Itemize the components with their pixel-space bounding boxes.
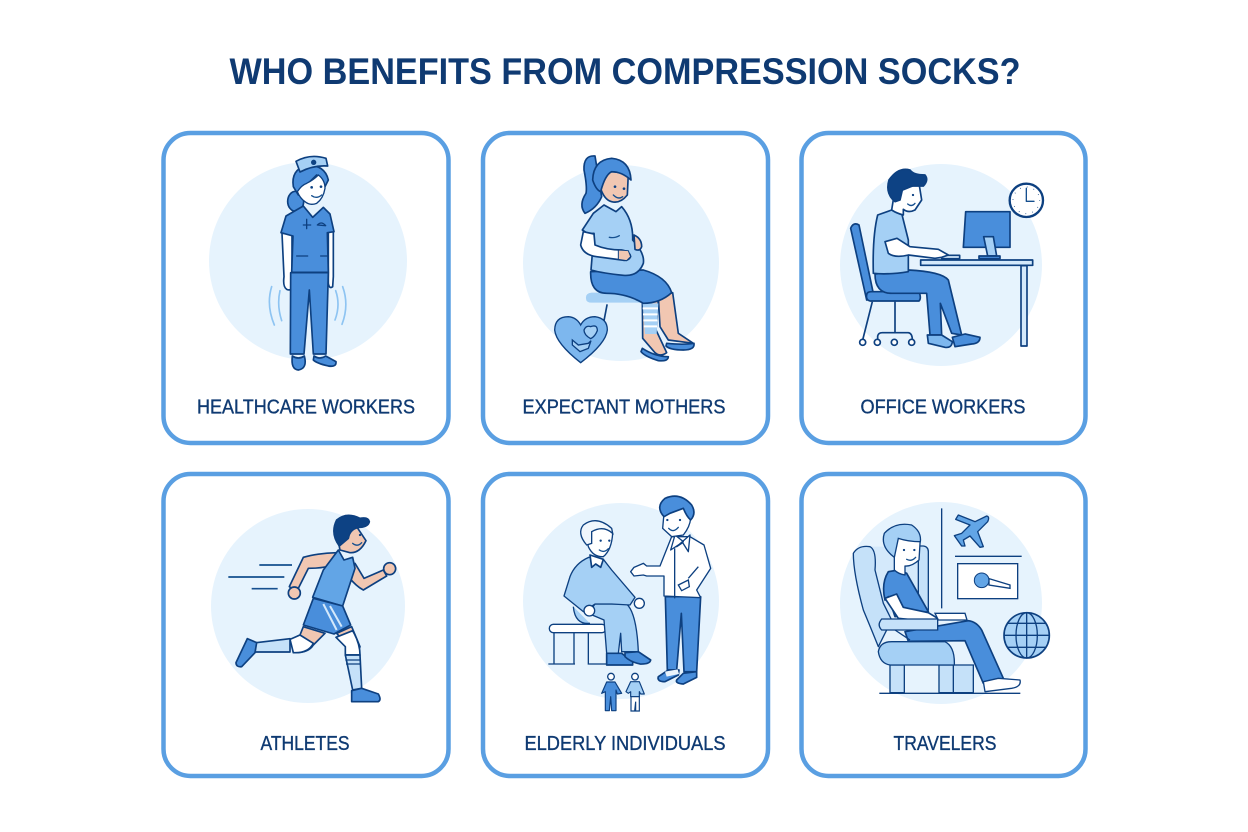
panel: athletes [164,474,448,776]
icon: office worker at desk [851,169,1043,347]
title: WHO BENEFITS FROM COMPRESSION SOCKS? [230,51,1020,92]
label: ATHLETES [260,733,350,755]
icon: nurse [269,156,346,370]
background circle [523,165,719,361]
icon: pregnant woman [555,156,694,363]
label: EXPECTANT MOTHERS [522,396,726,418]
label: ELDERLY INDIVIDUALS [524,733,726,755]
label: HEALTHCARE WORKERS [197,396,415,418]
panel: travelers [802,474,1086,776]
panel: healthcare workers [164,133,448,443]
icon: elderly man and caregiver [548,496,711,711]
background circle [211,509,405,703]
icon: seated traveler [853,508,1049,693]
background circle [840,164,1042,366]
background circle [209,162,407,360]
panel: elderly individuals [483,474,768,776]
label: OFFICE WORKERS [860,396,1026,418]
panel: office workers [802,133,1086,443]
label: TRAVELERS [894,733,996,755]
panel: expectant mothers [483,133,768,443]
icon: runner [228,515,396,702]
background circle [840,502,1042,704]
background circle [523,503,719,699]
